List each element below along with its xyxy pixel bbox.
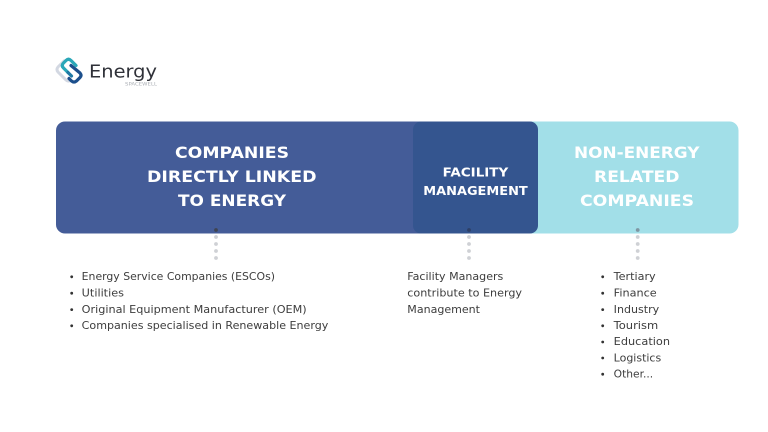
heading: companies directly linked to energy: DIRECTLY LINKED: [147, 167, 316, 186]
heading: companies directly linked to energy: TO ENERGY: [178, 191, 286, 210]
heading: non-energy related companies: COMPANIES: [580, 191, 694, 210]
heading: facility management: MANAGEMENT: [423, 183, 528, 198]
heading: non-energy related companies: RELATED: [594, 167, 680, 186]
list: non-energy related sectors: Other...: [614, 368, 653, 380]
heading: companies directly linked to energy: [147, 143, 316, 210]
heading: non-energy related companies: NON-ENERGY: [574, 143, 700, 162]
text: facility managers description: Facility Managers: [407, 271, 503, 283]
dotted connector: facility management: [467, 228, 471, 260]
panel: non-energy related companies: [500, 122, 738, 234]
heading: facility management: [423, 164, 528, 198]
dotted connector: non-energy related: [636, 228, 640, 260]
list: non-energy related sectors: Logistics: [614, 352, 661, 364]
list: companies directly linked to energy: [70, 271, 328, 332]
logo: [57, 59, 158, 88]
icon: logo mark: [57, 59, 81, 82]
list: non-energy related sectors: Finance: [614, 288, 657, 300]
dotted connector: companies directly linked: [214, 228, 218, 260]
list: companies directly linked to energy: Companies specialised in Renewable Energy: [82, 320, 328, 332]
logo subtext: SPACEWELL: [125, 82, 158, 88]
list: non-energy related sectors: [601, 271, 670, 380]
logo wordmark: Energy: [89, 62, 157, 82]
panel: facility management: [413, 122, 538, 234]
text: facility managers description: contribute to Energy: [407, 288, 522, 300]
list: companies directly linked to energy: Original Equipment Manufacturer (OEM): [82, 304, 307, 316]
list: companies directly linked to energy: Energy Service Companies (ESCOs): [82, 271, 275, 283]
heading: non-energy related companies: [574, 143, 700, 210]
panel: companies directly linked to energy: [56, 122, 456, 234]
text: facility managers description: Management: [407, 304, 480, 316]
text: facility managers description: [407, 271, 522, 316]
list: non-energy related sectors: Education: [614, 336, 670, 348]
list: companies directly linked to energy: Utilities: [82, 288, 124, 300]
list: non-energy related sectors: Tourism: [613, 320, 658, 332]
heading: facility management: FACILITY: [443, 164, 509, 179]
heading: companies directly linked to energy: COMPANIES: [175, 143, 289, 162]
list: non-energy related sectors: Industry: [614, 304, 659, 316]
list: non-energy related sectors: Tertiary: [613, 271, 656, 283]
